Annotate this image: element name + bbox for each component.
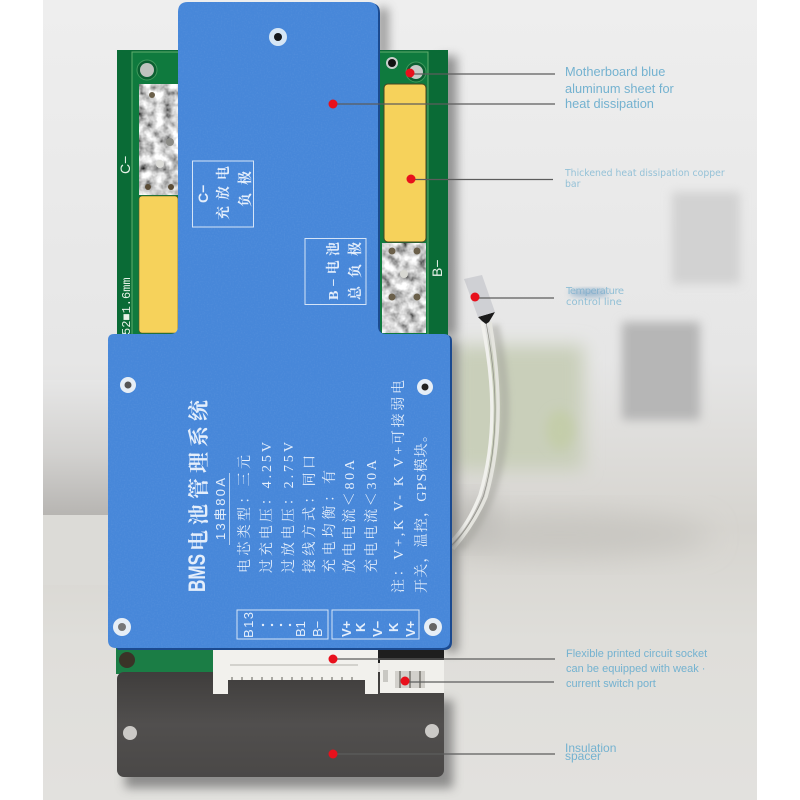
pin table: balance leads: B13 — [241, 612, 256, 638]
insulation spacer — [117, 672, 444, 777]
copper bar: right — [384, 84, 426, 242]
specification list: 充电均衡：有 — [321, 470, 338, 573]
screw: lower right — [424, 618, 442, 636]
mounting hole: top left — [137, 60, 157, 80]
callout: motherboard blue aluminum sheet: Motherboard blue — [565, 64, 665, 79]
callout: flexible printed circuit socket: Flexible printed circuit socket — [566, 648, 707, 660]
label box: C- terminal: 负极 — [237, 171, 254, 207]
title: BMS battery management system — [184, 399, 211, 592]
green circuit board — [117, 50, 448, 340]
label box: C- terminal: C− — [195, 185, 211, 203]
note text: 开关，温控，GPS模块。 — [413, 428, 430, 593]
screw: lower left — [113, 618, 131, 636]
specification list: 放电电流＜80A — [341, 459, 358, 573]
callout: temperature control line — [470, 286, 624, 308]
drop shadow behind board — [125, 8, 458, 788]
callout: flexible printed circuit socket — [328, 648, 707, 690]
pin table: balance leads: B− — [310, 621, 325, 637]
pin table: switch port: V+ — [339, 620, 354, 637]
pin table: balance leads: B1 — [293, 621, 308, 637]
temperature sensor cable — [451, 275, 504, 549]
copper bar: left — [139, 196, 178, 333]
solder pad: left — [139, 84, 178, 195]
label box: B- terminal: B−电池 — [325, 242, 342, 300]
divider under model — [228, 473, 230, 545]
callout: thickened copper bar: bar — [565, 179, 581, 190]
specification list: 过放电压：2.75V — [280, 442, 297, 573]
screw: upper left — [120, 377, 136, 393]
callout: thickened copper bar — [406, 168, 725, 190]
callout: thickened copper bar: Thickened heat dissipation copper — [564, 168, 725, 179]
callout: motherboard blue aluminum sheet — [328, 64, 675, 111]
model: 13S 80A: 13串80A — [213, 478, 228, 540]
pin table: switch port — [332, 610, 419, 639]
specification list — [236, 442, 380, 573]
callout: insulation spacer — [328, 741, 616, 763]
pin table: switch port: K — [353, 622, 368, 632]
pcb label B-: B− — [429, 259, 445, 277]
pcb label C-: C− — [117, 156, 133, 174]
label box: C- terminal — [192, 161, 254, 227]
pin table: balance leads — [237, 610, 328, 639]
screw: top — [269, 28, 287, 46]
callout: motherboard blue aluminum sheet: aluminum sheet for — [565, 81, 675, 96]
title: BMS battery management system: 电池管理系统 — [187, 399, 211, 551]
callout: insulation spacer: Insulation — [565, 741, 616, 755]
socket: flexible printed circuit — [213, 648, 378, 694]
panel: blue aluminum sheet — [108, 2, 452, 650]
note text — [390, 380, 430, 593]
callout: temperature control line: Temperature — [565, 286, 624, 297]
callout: flexible printed circuit socket: can be equipped with weak · — [566, 663, 705, 675]
pcb label size: 52■1.6mm — [120, 277, 134, 335]
label box: B- terminal — [305, 238, 366, 304]
socket: weak current switch — [380, 660, 444, 693]
specification list: 充电电流＜30A — [363, 459, 380, 573]
note text: 注：V+,K V- K V+可接弱电 — [390, 380, 407, 593]
title: BMS battery management system: BMS — [184, 554, 211, 592]
specification list: 过充电压：4.25V — [258, 442, 275, 573]
label box: B- terminal: 总负极 — [347, 242, 364, 300]
specification list: 接线方式：同口 — [301, 455, 318, 573]
small via — [386, 57, 398, 69]
solder pad: right — [382, 243, 426, 333]
callout: flexible printed circuit socket: current switch port — [566, 678, 656, 690]
callout: insulation spacer: spacer — [565, 749, 601, 763]
pin table: switch port: K — [386, 622, 401, 632]
lower board strip and connectors — [116, 645, 444, 777]
callout: motherboard blue aluminum sheet: heat dissipation — [565, 96, 654, 111]
label box: C- terminal: 充放电 — [215, 166, 232, 220]
callout: temperature control line: control line — [566, 297, 622, 308]
pin table: switch port: V− — [370, 620, 385, 637]
mounting hole: top right — [406, 62, 426, 82]
screw: upper right — [417, 379, 433, 395]
pin table: switch port: V+ — [403, 620, 418, 637]
specification list: 电芯类型：三元 — [236, 455, 253, 573]
